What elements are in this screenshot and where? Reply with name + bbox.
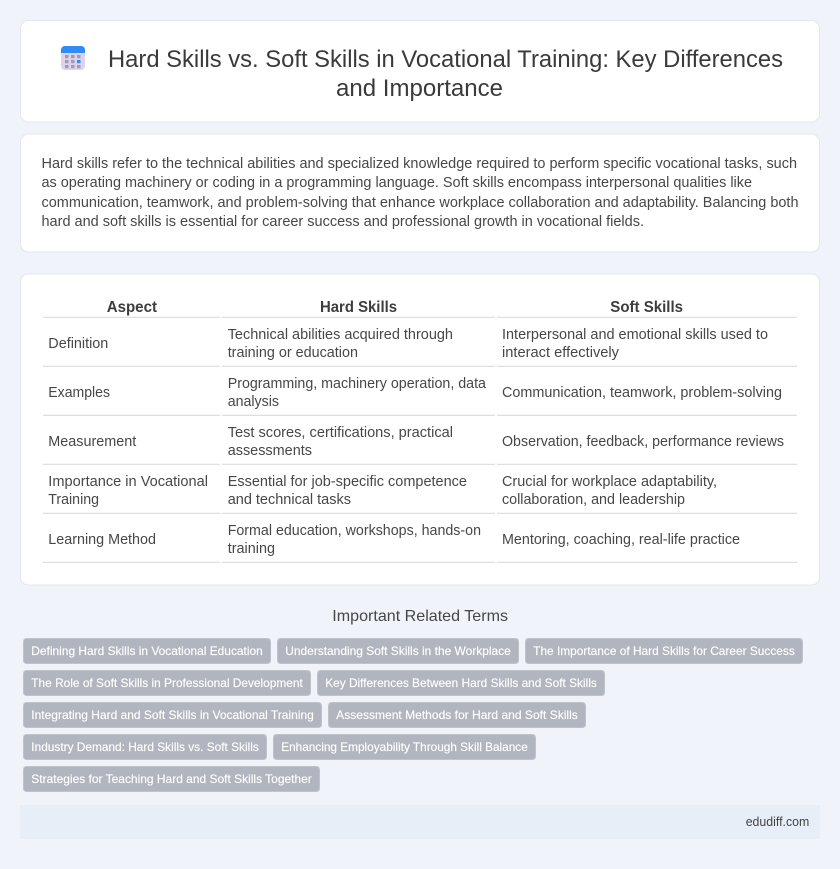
row: measurement <box>48 424 784 459</box>
row: measurement: Measurement <box>48 433 137 450</box>
row: examples: Communication, teamwork, problem-solving <box>502 384 782 401</box>
panel: comparison table <box>20 274 820 585</box>
tag <box>318 670 604 696</box>
heading: important related terms: Important Related Terms <box>332 608 508 625</box>
intro paragraph: Hard skills refer to the technical abilities and specialized knowledge required to perform specific vocational tasks, such <box>42 155 797 172</box>
related term tags <box>24 638 802 792</box>
row: importance in vocational training: collaboration, and leadership <box>502 491 685 508</box>
row: examples: Examples <box>48 384 110 401</box>
title: Hard Skills vs. Soft Skills in Vocational Training: Key Differences <box>108 46 783 73</box>
tag: The Importance of Hard Skills for Career Success <box>533 644 795 658</box>
row: examples: Programming, machinery operation, data <box>228 375 487 392</box>
tag <box>24 670 310 696</box>
tag: Assessment Methods for Hard and Soft Skills <box>336 708 578 722</box>
row: importance in vocational training <box>48 473 717 508</box>
row: learning method: training <box>228 540 275 557</box>
row: examples: analysis <box>228 393 279 410</box>
row: learning method <box>48 522 740 557</box>
footer: edudiff.com <box>746 814 809 829</box>
tag <box>278 638 518 664</box>
header panel <box>20 20 820 122</box>
tag <box>24 734 266 760</box>
table header row <box>107 299 683 316</box>
row: definition: Interpersonal and emotional skills used to <box>502 326 768 343</box>
intro paragraph <box>42 155 798 230</box>
row: importance in vocational training: Training <box>48 491 99 508</box>
row: learning method: Formal education, workshops, hands-on <box>228 522 481 539</box>
row: learning method: Learning Method <box>48 531 156 548</box>
tag: Understanding Soft Skills in the Workplace <box>285 644 511 658</box>
tag: Integrating Hard and Soft Skills in Vocational Training <box>31 708 314 722</box>
tag: Key Differences Between Hard Skills and Soft Skills <box>325 676 597 690</box>
icon: calendar <box>61 46 85 70</box>
tag <box>328 702 586 728</box>
tag: Strategies for Teaching Hard and Soft Skills Together <box>31 772 312 786</box>
row: examples <box>48 375 782 410</box>
title: and Importance <box>336 75 503 102</box>
intro paragraph: hard and soft skills is essential for career success and professional growth in vocational fields. <box>42 213 644 230</box>
tag: Enhancing Employability Through Skill Balance <box>281 740 528 754</box>
row: importance in vocational training: Importance in Vocational <box>48 473 208 490</box>
intro paragraph: as operating machinery or coding in a programming language. Soft skills encompass interpersonal qualities like <box>42 174 752 191</box>
intro paragraph: communication, teamwork, and problem-solving that enhance workplace collaboration and adaptability. Balancing both <box>42 194 798 211</box>
table header row: Aspect <box>107 299 158 316</box>
footer <box>20 805 820 839</box>
row: definition <box>48 326 768 361</box>
row: definition: training or education <box>228 344 358 361</box>
table header row: Hard Skills <box>320 299 397 316</box>
row: measurement: Observation, feedback, performance reviews <box>502 433 784 450</box>
row: learning method: Mentoring, coaching, real-life practice <box>502 531 740 548</box>
row: importance in vocational training: and technical tasks <box>228 491 351 508</box>
row: importance in vocational training: Crucial for workplace adaptability, <box>502 473 717 490</box>
title <box>108 46 783 102</box>
panel: introduction <box>20 134 820 252</box>
tag <box>24 766 320 792</box>
tag: Defining Hard Skills in Vocational Education <box>31 644 263 658</box>
row: definition: Technical abilities acquired through <box>228 326 453 343</box>
row: definition: interact effectively <box>502 344 619 361</box>
tag <box>24 638 270 664</box>
tag: The Role of Soft Skills in Professional Development <box>31 676 303 690</box>
tag: Industry Demand: Hard Skills vs. Soft Skills <box>31 740 259 754</box>
tag <box>274 734 536 760</box>
row: measurement: Test scores, certifications, practical <box>228 424 453 441</box>
row: definition: Definition <box>48 335 108 352</box>
tag <box>526 638 802 664</box>
tag <box>24 702 322 728</box>
row: measurement: assessments <box>228 442 312 459</box>
row: importance in vocational training: Essential for job-specific competence <box>228 473 467 490</box>
table header row: Soft Skills <box>610 299 683 316</box>
